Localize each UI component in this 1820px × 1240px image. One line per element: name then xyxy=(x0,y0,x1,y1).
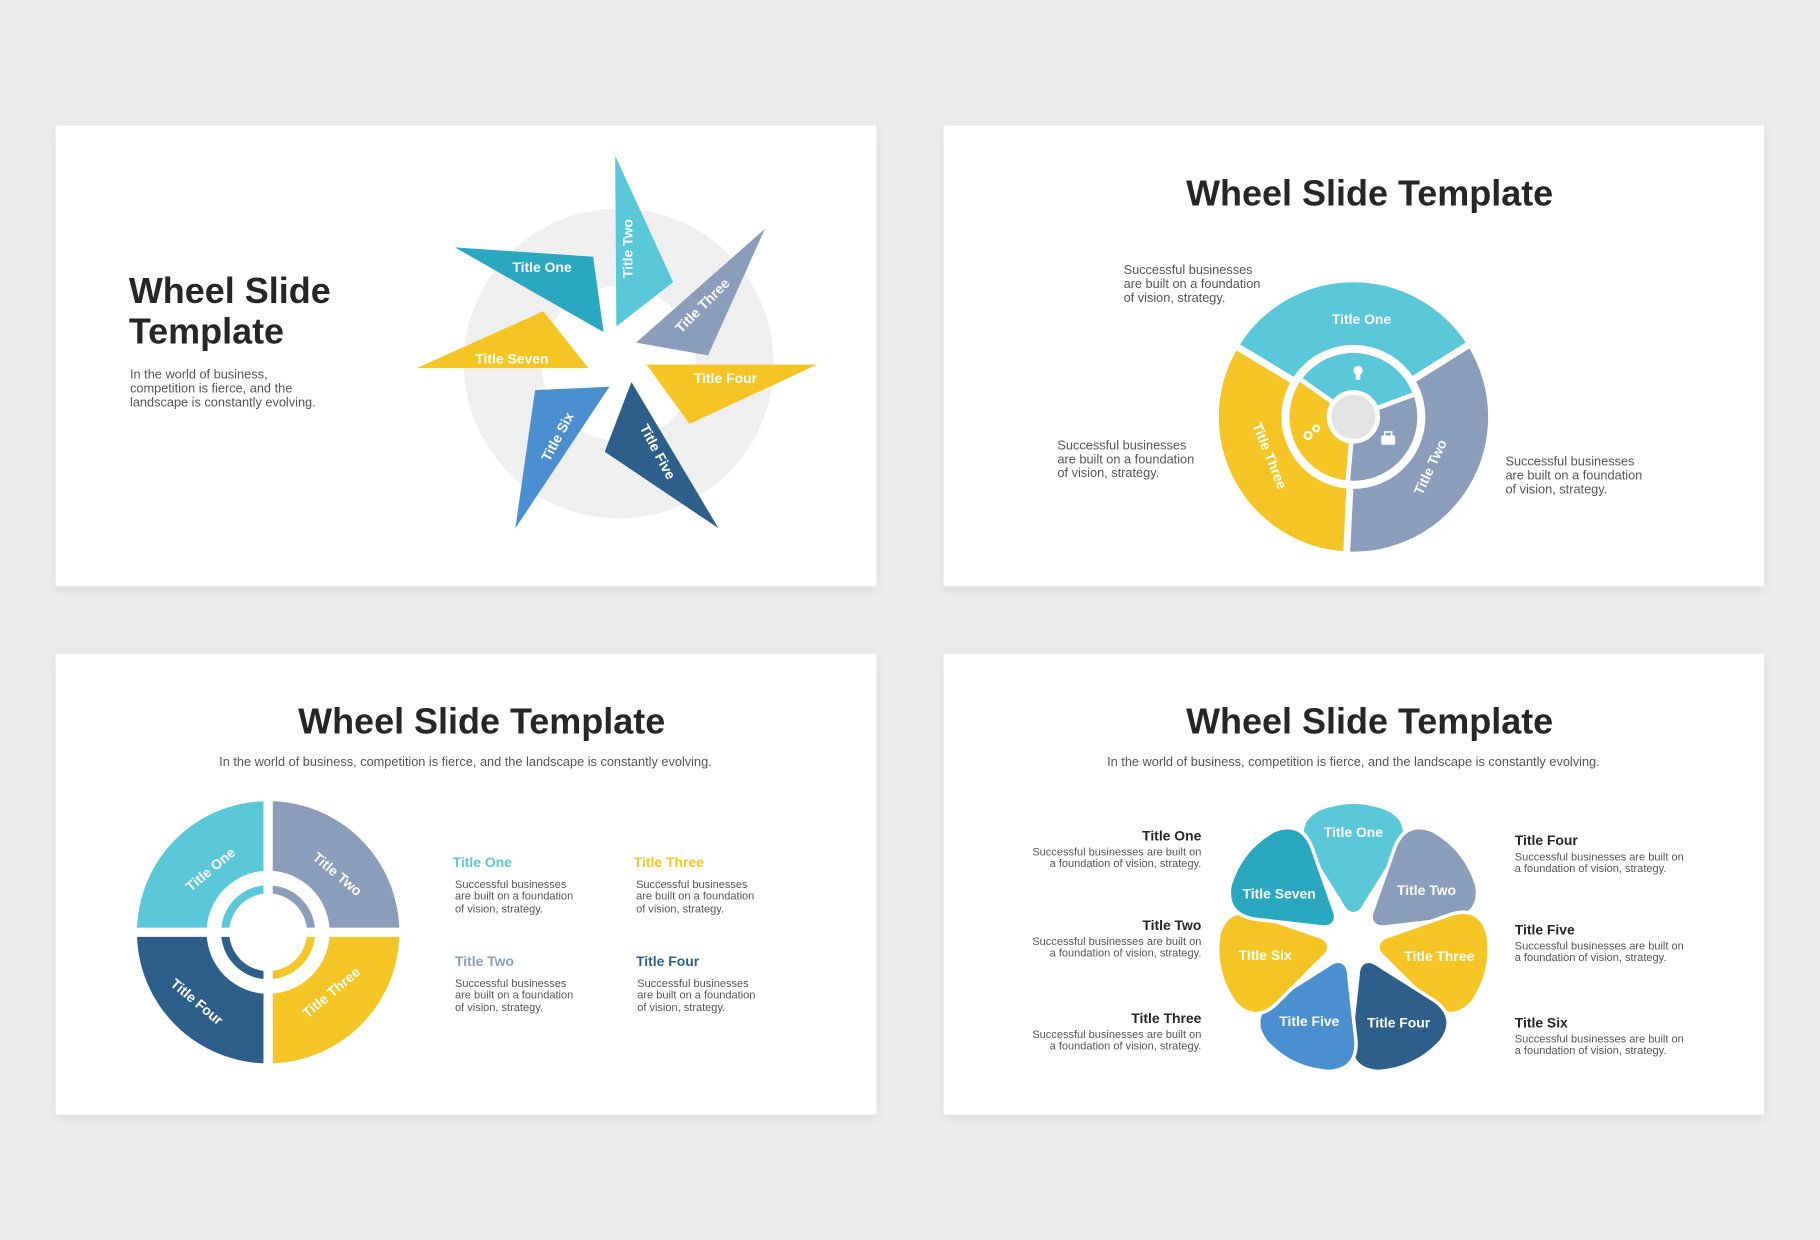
petal labels: Title Five xyxy=(1279,1013,1340,1029)
text block xyxy=(130,367,316,409)
legend: are built on a foundation xyxy=(636,891,754,903)
legend: are built on a foundation xyxy=(455,891,573,903)
panel: ring wheel: Successful businesses xyxy=(1057,437,1186,452)
text block: In the world of business, xyxy=(130,367,268,382)
legend: are built on a foundation xyxy=(637,989,755,1001)
legend: of vision, strategy. xyxy=(636,904,724,916)
title: Wheel Slide Template xyxy=(298,701,665,742)
star chart: Title Four xyxy=(694,370,758,386)
wheel chart: Title One xyxy=(1332,311,1391,327)
star chart: Title Two xyxy=(620,219,636,278)
panel: ring wheel: of vision, strategy. xyxy=(1057,465,1159,480)
petal labels: Title Six xyxy=(1239,947,1292,963)
title: Wheel Slide Template xyxy=(1186,701,1553,742)
wheel chart: Title Three xyxy=(1249,420,1290,491)
star chart: Title Seven xyxy=(475,350,548,366)
side texts left: a foundation of vision, strategy. xyxy=(1050,1040,1201,1052)
legend: of vision, strategy. xyxy=(637,1002,725,1014)
wheel chart: Title Two xyxy=(1410,437,1450,497)
side texts left: a foundation of vision, strategy. xyxy=(1050,948,1201,960)
legend: Successful businesses xyxy=(636,879,748,891)
quadrant chart: Title Four xyxy=(168,975,227,1028)
text block: landscape is constantly evolving. xyxy=(130,394,316,409)
star chart xyxy=(417,156,817,528)
legend: of vision, strategy. xyxy=(455,1002,543,1014)
side texts left: Successful businesses are built on xyxy=(1032,847,1201,859)
petal labels: Title Seven xyxy=(1243,886,1316,902)
side texts left: Title Two xyxy=(1142,917,1201,933)
side texts right: a foundation of vision, strategy. xyxy=(1515,952,1666,964)
side texts right xyxy=(1515,832,1684,1057)
panel: ring wheel: are built on a foundation xyxy=(1057,451,1194,466)
star chart: Title Five xyxy=(637,421,679,482)
side texts right: Title Six xyxy=(1515,1014,1568,1030)
legend: Title Two xyxy=(455,953,514,969)
side texts right: a foundation of vision, strategy. xyxy=(1515,863,1666,875)
panel: ring wheel: Successful businesses xyxy=(1505,454,1634,469)
petal labels xyxy=(1239,824,1475,1030)
petal labels: Title Four xyxy=(1367,1014,1431,1030)
subtitle: In the world of business, competition is fierce, and the landscape is constantly evolving. xyxy=(1107,754,1600,769)
flower chart xyxy=(1208,802,1498,1085)
title: Wheel Slide Template xyxy=(1186,173,1553,214)
side texts left: Successful businesses are built on xyxy=(1032,936,1201,948)
side texts left: Successful businesses are built on xyxy=(1032,1029,1201,1041)
panel: flower wheel xyxy=(944,654,1764,1114)
panel: ring wheel xyxy=(944,126,1764,586)
legend: Successful businesses xyxy=(455,879,567,891)
star chart: Title Six xyxy=(538,409,577,464)
legend: are built on a foundation xyxy=(455,989,573,1001)
legend xyxy=(453,854,755,1014)
side texts right: Title Four xyxy=(1515,832,1578,848)
side texts left: Title One xyxy=(1142,828,1202,844)
petal labels: Title One xyxy=(1324,824,1383,840)
subtitle: In the world of business, competition is fierce, and the landscape is constantly evolving. xyxy=(219,754,712,769)
side texts right: a foundation of vision, strategy. xyxy=(1515,1045,1666,1057)
legend: Successful businesses xyxy=(637,978,749,990)
title: Wheel Slide xyxy=(129,270,331,311)
petal labels: Title Three xyxy=(1404,948,1475,964)
side texts right: Successful businesses are built on xyxy=(1515,851,1684,863)
legend: Title Three xyxy=(634,854,704,870)
legend: of vision, strategy. xyxy=(455,904,543,916)
quadrant chart: Title One xyxy=(183,844,238,894)
panel: ring wheel: of vision, strategy. xyxy=(1505,481,1607,496)
legend: Title One xyxy=(453,854,512,870)
side texts left: Title Three xyxy=(1131,1010,1202,1026)
text block: competition is fierce, and the xyxy=(130,380,292,395)
side texts left xyxy=(1032,828,1202,1052)
star chart: Title One xyxy=(512,259,572,275)
background ring xyxy=(503,247,735,480)
wheel chart xyxy=(1219,282,1488,557)
panel: quadrant wheel xyxy=(56,654,876,1114)
text blocks: of vision, strategy. xyxy=(1124,290,1225,305)
icon: bulb xyxy=(1353,366,1363,380)
side texts right: Successful businesses are built on xyxy=(1515,941,1684,953)
icon: gears xyxy=(1305,426,1319,439)
text blocks: are built on a foundation xyxy=(1124,276,1260,291)
title xyxy=(129,270,331,352)
side texts right: Successful businesses are built on xyxy=(1515,1034,1684,1046)
icon: briefcase xyxy=(1381,432,1395,445)
star chart: Title Three xyxy=(672,275,733,336)
side texts right: Title Five xyxy=(1515,922,1575,938)
quadrant chart xyxy=(131,795,405,1069)
panel: star wheel xyxy=(56,126,876,586)
side texts left: a foundation of vision, strategy. xyxy=(1050,858,1201,870)
quadrant chart: Title Two xyxy=(310,849,365,899)
panel: ring wheel: are built on a foundation xyxy=(1505,468,1642,483)
text blocks: Successful businesses xyxy=(1124,262,1253,277)
title: Template xyxy=(129,311,284,352)
legend: Title Four xyxy=(636,953,700,969)
petal labels: Title Two xyxy=(1397,882,1456,898)
legend: Successful businesses xyxy=(455,978,567,990)
quadrant chart: Title Three xyxy=(299,963,363,1021)
text blocks xyxy=(1124,262,1260,305)
